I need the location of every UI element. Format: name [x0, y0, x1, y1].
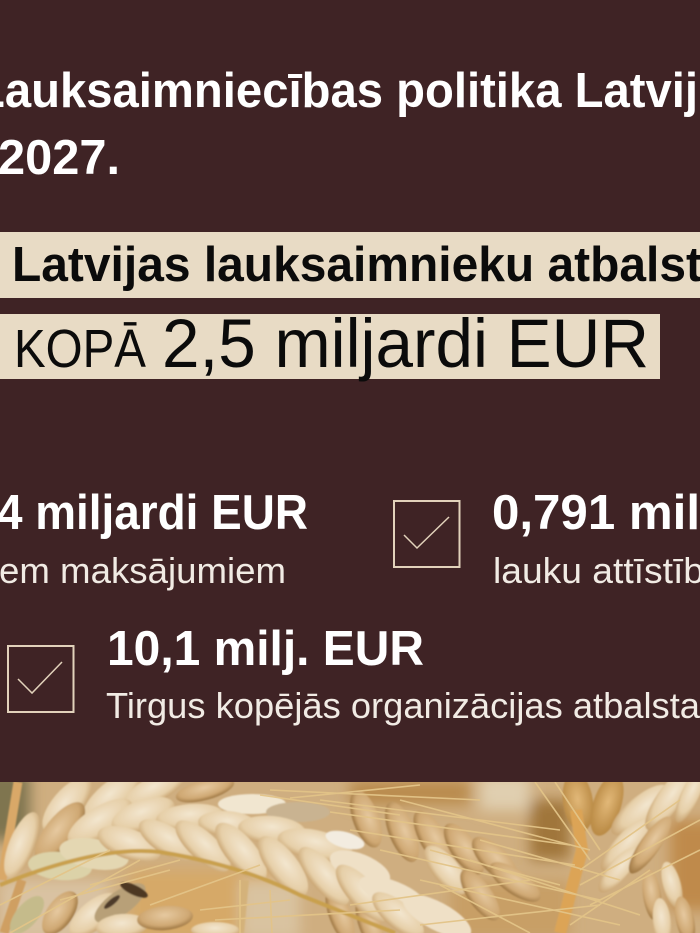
item: market organisation: 10,1 milj. EUR [107, 622, 424, 676]
stems [2, 782, 18, 880]
item: direct payments: 4 miljardi EUR [0, 486, 308, 540]
item: rural development: 0,791 mil [492, 486, 700, 540]
item: rural development [492, 486, 700, 591]
icon: checkbox rural development [394, 501, 460, 567]
banner: total amount: KOPĀ [14, 319, 146, 379]
banner: total amount: 2,5 miljardi EUR [162, 305, 649, 382]
icon: checkbox market organisation [8, 646, 74, 712]
lower left ear [10, 881, 239, 933]
item: rural development: lauku attīstīb [493, 550, 700, 591]
awns [0, 782, 700, 933]
title [0, 64, 698, 185]
title line 2: 2027. [0, 131, 120, 185]
right ear and stem [559, 764, 700, 933]
banner: support heading: Latvijas lauksaimnieku atbalst [12, 238, 700, 292]
item: market organisation: Tirgus kopējās organizācijas atbalsta [106, 685, 700, 726]
photo: wheat ears [0, 782, 700, 933]
item: direct payments [0, 486, 308, 591]
back ear kernels [319, 786, 546, 933]
main ear [0, 782, 472, 933]
item: market organisation [106, 622, 700, 726]
item: direct payments: em maksājumiem [0, 550, 286, 591]
